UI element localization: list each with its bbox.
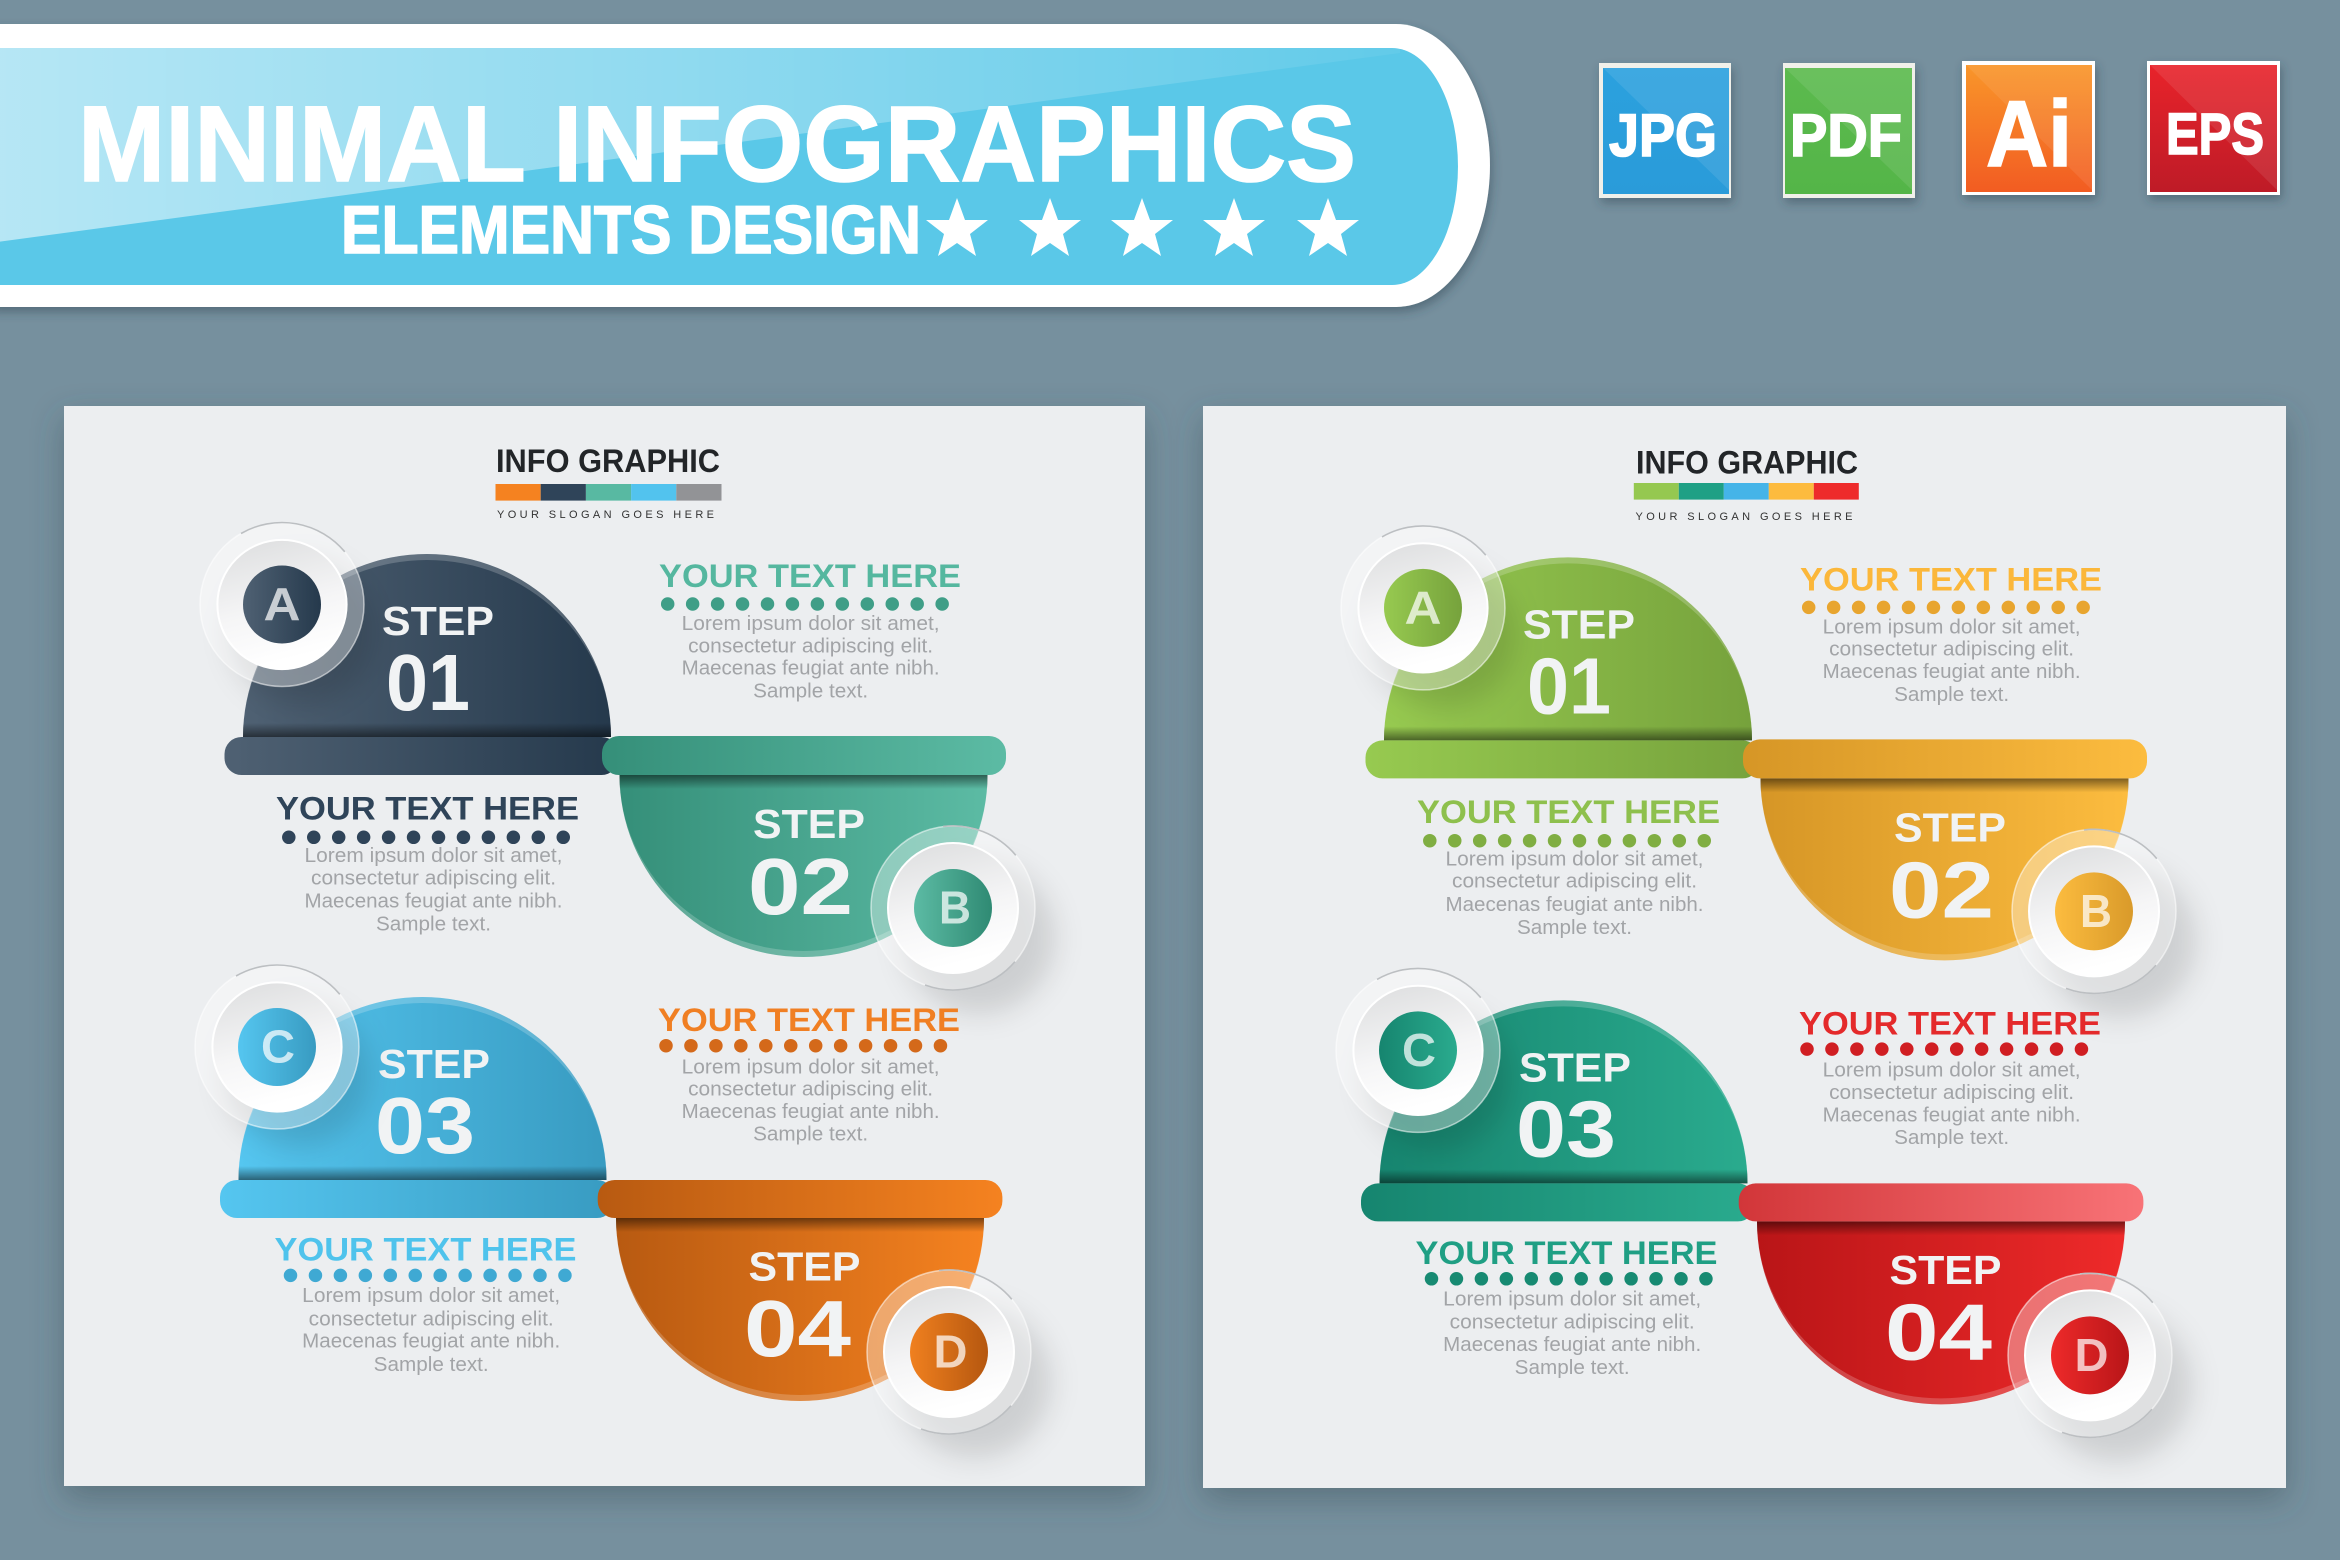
- step 03 text block: Sample text.: [753, 1124, 868, 1146]
- step 01 label: STEP: [1523, 601, 1635, 647]
- step 02 text block: Maecenas feugiat ante nibh.: [1446, 894, 1704, 916]
- step 04 text block: YOUR TEXT HERE: [274, 1232, 576, 1268]
- icon: PDF: [1783, 63, 1915, 198]
- step 01 text block: consectetur adipiscing elit.: [688, 635, 933, 657]
- step 04 text block: Sample text.: [374, 1354, 489, 1376]
- rating stars: [926, 198, 1359, 256]
- step 04 text block: Lorem ipsum dolor sit amet,: [302, 1285, 560, 1307]
- badge A: [1341, 526, 1515, 708]
- step 02 text block: Lorem ipsum dolor sit amet,: [304, 845, 562, 867]
- step 02 bowl: [1743, 739, 2147, 960]
- step 03 text block: consectetur adipiscing elit.: [1829, 1082, 2074, 1104]
- step 03 text block: [1799, 1005, 2101, 1149]
- step 01 text block: [659, 558, 961, 702]
- step 02 text block: Maecenas feugiat ante nibh.: [304, 891, 562, 913]
- step 02 label: 02: [748, 842, 853, 931]
- step 04 text block: consectetur adipiscing elit.: [1450, 1312, 1695, 1334]
- badge A: [200, 522, 374, 704]
- badge C: C: [261, 1020, 295, 1072]
- step 03 label: [1516, 1044, 1631, 1173]
- step 01 text block: Lorem ipsum dolor sit amet,: [1823, 616, 2081, 638]
- badge D: D: [2074, 1329, 2108, 1381]
- step 02 label: [1889, 804, 2006, 934]
- step 02 text block: YOUR TEXT HERE: [1417, 794, 1720, 830]
- step 03 text block: YOUR TEXT HERE: [658, 1002, 960, 1038]
- step 04 text block: Maecenas feugiat ante nibh.: [302, 1331, 560, 1353]
- step 01 text block: YOUR TEXT HERE: [659, 558, 961, 594]
- step 01 text block: Lorem ipsum dolor sit amet,: [682, 613, 940, 635]
- step 02 label: [748, 801, 865, 931]
- step 01 text block: Maecenas feugiat ante nibh.: [1823, 661, 2081, 683]
- step 02 label: 02: [1889, 845, 1994, 934]
- banner title: MINIMAL INFOGRAPHICS: [78, 83, 1356, 204]
- left panel heading: [496, 443, 722, 521]
- panel: right infographic card: [1203, 406, 2286, 1488]
- banner subtitle: ELEMENTS DESIGN: [341, 192, 921, 268]
- step 02 text block: Sample text.: [1517, 917, 1632, 939]
- step 04 bowl: [598, 1180, 1002, 1401]
- step 02 text block: YOUR TEXT HERE: [276, 790, 579, 826]
- step 03 label: 03: [1516, 1084, 1616, 1173]
- step 04 label: 04: [744, 1284, 852, 1373]
- step 02 label: STEP: [1894, 804, 2006, 850]
- step 02 text block: Sample text.: [376, 914, 491, 936]
- step 03 dome: [1361, 1000, 1755, 1221]
- step 04 label: 04: [1885, 1287, 1993, 1376]
- badge C: [1336, 968, 1510, 1150]
- step 01 label: 01: [1527, 641, 1611, 730]
- step 04 text block: Lorem ipsum dolor sit amet,: [1443, 1288, 1701, 1310]
- badge C: C: [1402, 1024, 1436, 1076]
- badge B: [871, 826, 1055, 1014]
- step 02 text block: consectetur adipiscing elit.: [1452, 871, 1697, 893]
- badge D: [2008, 1273, 2192, 1461]
- step 01 text block: Sample text.: [1894, 684, 2009, 706]
- step 03 text block: [658, 1002, 960, 1146]
- step 04 text block: consectetur adipiscing elit.: [309, 1308, 554, 1330]
- badge C: [195, 965, 369, 1147]
- step 04 label: [744, 1244, 860, 1373]
- step 02 bowl: [602, 736, 1006, 957]
- step 03 label: STEP: [378, 1041, 490, 1087]
- step 03 text block: Lorem ipsum dolor sit amet,: [1823, 1060, 2081, 1082]
- step 04 text block: Maecenas feugiat ante nibh.: [1443, 1334, 1701, 1356]
- step 04 label: STEP: [748, 1244, 860, 1290]
- step 03 label: [375, 1041, 490, 1170]
- left panel heading: YOUR SLOGAN GOES HERE: [497, 509, 714, 521]
- badge A: A: [264, 578, 300, 630]
- icon: EPS: [2147, 61, 2280, 195]
- icon: PDF: PDF: [1790, 102, 1902, 169]
- step 01 text block: YOUR TEXT HERE: [1800, 561, 2102, 597]
- step 03 label: 03: [375, 1081, 475, 1170]
- step 03 label: STEP: [1519, 1044, 1631, 1090]
- badge D: [867, 1270, 1051, 1458]
- step 01 text block: [1800, 561, 2102, 706]
- left panel heading: INFO GRAPHIC: [496, 443, 720, 479]
- badge B: B: [939, 882, 971, 934]
- right infographic: [1336, 526, 2196, 1461]
- right panel heading: YOUR SLOGAN GOES HERE: [1636, 511, 1852, 523]
- step 01 text block: Maecenas feugiat ante nibh.: [682, 658, 940, 680]
- step 03 text block: Lorem ipsum dolor sit amet,: [682, 1056, 940, 1078]
- step 03 dome: [220, 997, 614, 1218]
- left infographic: [195, 522, 1055, 1458]
- step 04 bowl: [1739, 1183, 2143, 1404]
- badge A: A: [1404, 581, 1442, 633]
- step 01 dome: [1366, 557, 1760, 778]
- step 02 text block: consectetur adipiscing elit.: [311, 867, 556, 889]
- step 01 text block: Sample text.: [753, 680, 868, 702]
- icon: Ai: [1962, 61, 2095, 195]
- step 01 label: [382, 598, 494, 727]
- banner: [0, 24, 1490, 307]
- badge D: D: [934, 1326, 968, 1378]
- icon: JPG: [1599, 63, 1731, 198]
- step 04 label: [1885, 1247, 2002, 1376]
- icon: JPG: JPG: [1609, 102, 1717, 169]
- badge B: B: [2080, 885, 2112, 937]
- step 04 label: STEP: [1890, 1247, 2002, 1293]
- step 04 text block: [274, 1232, 576, 1376]
- step 03 text block: Sample text.: [1894, 1127, 2009, 1149]
- icon: EPS: EPS: [2166, 102, 2264, 167]
- step 01 dome: [224, 554, 618, 775]
- right panel heading: INFO GRAPHIC: [1636, 444, 1858, 480]
- step 01 label: 01: [386, 638, 470, 727]
- panel: left infographic card: [64, 406, 1145, 1486]
- step 01 text block: consectetur adipiscing elit.: [1829, 639, 2074, 661]
- step 04 text block: Sample text.: [1515, 1357, 1630, 1379]
- step 01 label: STEP: [382, 598, 494, 644]
- step 03 text block: YOUR TEXT HERE: [1799, 1005, 2101, 1041]
- step 03 text block: Maecenas feugiat ante nibh.: [682, 1101, 940, 1123]
- icon: Ai: Ai: [1986, 81, 2072, 186]
- step 03 text block: Maecenas feugiat ante nibh.: [1823, 1104, 2081, 1126]
- right panel heading: [1634, 444, 1859, 523]
- step 03 text block: consectetur adipiscing elit.: [688, 1079, 933, 1101]
- step 02 label: STEP: [753, 801, 865, 847]
- step 04 text block: [1416, 1235, 1718, 1379]
- badge B: [2012, 829, 2196, 1017]
- step 02 text block: Lorem ipsum dolor sit amet,: [1446, 848, 1704, 870]
- step 04 text block: YOUR TEXT HERE: [1416, 1235, 1718, 1271]
- step 02 text block: [1417, 794, 1720, 939]
- step 01 label: [1523, 601, 1635, 730]
- step 02 text block: [276, 790, 579, 936]
